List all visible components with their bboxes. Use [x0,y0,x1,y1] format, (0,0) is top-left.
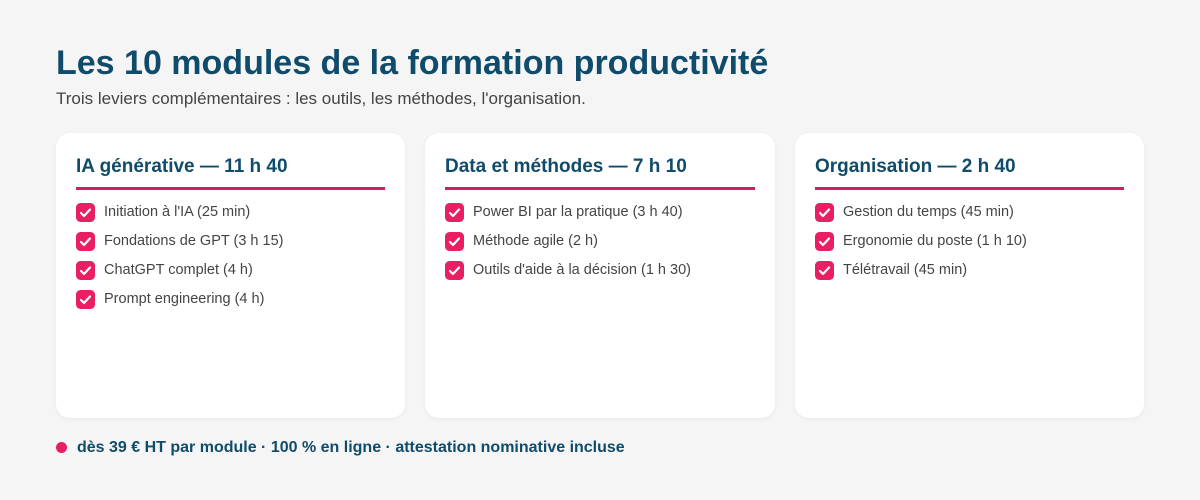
item: Prompt engineering: Prompt engineering (4 h) [104,291,264,307]
title: Les 10 modules de la formation productivité [56,44,768,82]
item: Télétravail: Télétravail (45 min) [843,262,967,278]
item: Outils d'aide à la décision: Outils d'aide à la décision (1 h 30) [473,262,691,278]
item: Méthode agile [445,232,598,251]
footer note: dès 39 € HT par module · 100 % en ligne · attestation nominative incluse [77,439,625,456]
item: Méthode agile: Méthode agile (2 h) [473,233,598,249]
panel: Data et méthodes [425,133,775,418]
subtitle: Trois leviers complémentaires : les outils, les méthodes, l'organisation. [56,89,586,108]
icon: footer dot [56,442,67,453]
heading: Organisation: Organisation — 2 h 40 [815,156,1016,177]
item: Power BI: Power BI par la pratique (3 h 40) [473,204,683,220]
heading: IA générative: IA générative — 11 h 40 [76,156,288,177]
panel: Organisation [795,133,1144,418]
item: Gestion du temps: Gestion du temps (45 min) [843,204,1014,220]
item: ChatGPT complet: ChatGPT complet (4 h) [104,262,253,278]
item: Télétravail [815,261,967,280]
panel: IA générative [56,133,405,418]
heading: Data et méthodes: Data et méthodes — 7 h 10 [445,156,687,177]
item: Ergonomie du poste: Ergonomie du poste (1 h 10) [843,233,1027,249]
item: Fondations de GPT: Fondations de GPT (3 h 15) [104,233,283,249]
item: Initiation à l'IA: Initiation à l'IA (25 min) [104,204,250,220]
